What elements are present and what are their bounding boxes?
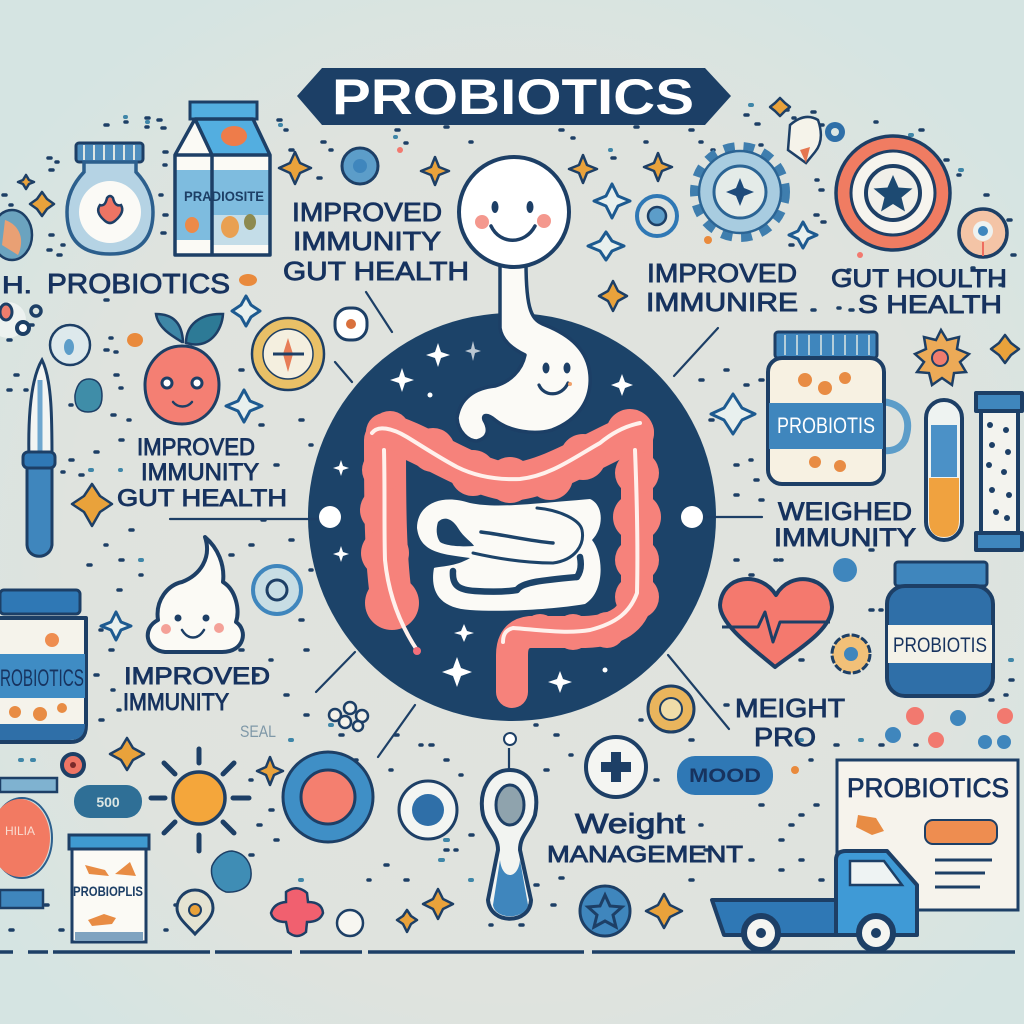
central circle: digestive system — [308, 262, 716, 721]
icon: red button — [283, 752, 373, 842]
icon: yogurt swirl — [148, 537, 243, 652]
icon: probiotic jar right with mug handle — [768, 332, 908, 484]
icon: gold sunburst — [915, 330, 969, 385]
text block: left top — [283, 197, 469, 286]
icon: orange-red dot — [62, 754, 84, 776]
icon: flower donut — [832, 635, 870, 673]
text block: left middle: IMMUNITY — [141, 459, 259, 486]
icon: peach character — [145, 314, 223, 424]
icon: small dial — [177, 890, 213, 934]
text block: left lower: IMPROVED — [124, 663, 270, 690]
badge: 500: 500 — [96, 794, 120, 810]
icon: jar lower left: PROBIOPLIS — [73, 883, 143, 899]
icon: concentric ring left — [253, 566, 301, 614]
ground line — [0, 950, 1015, 954]
icon: probiotics jar left — [0, 590, 86, 742]
text: probiotics left: PROBIOTICS — [47, 268, 230, 299]
text block: right lower: PRO — [754, 722, 816, 752]
text block: left lower: IMMUNITY — [123, 689, 229, 716]
icon: jar top left — [67, 143, 153, 254]
text block: right lower — [735, 693, 845, 752]
icon: jar lower left — [69, 835, 149, 942]
icon: milk carton: PRADIOSITE — [184, 188, 264, 204]
icon: star shield — [836, 136, 950, 250]
text block: far right: S HEALTH — [858, 291, 1002, 319]
icon: sketch badge — [788, 117, 845, 163]
icon: sun — [151, 749, 249, 851]
icon: jar bottom edge: HILIA — [5, 824, 35, 838]
text block: right middle: IMMUNITY — [774, 524, 916, 552]
mood badge — [677, 756, 773, 795]
icon: blue badge — [342, 148, 378, 184]
large intestine — [360, 409, 661, 692]
text block: left middle: GUT HEALTH — [117, 485, 287, 512]
poster: probiotics — [837, 760, 1018, 910]
text block: right lower: MEIGHT — [735, 693, 845, 723]
icon: heart with pulse — [720, 579, 832, 667]
icon: gold ring — [648, 686, 694, 732]
icon: gear — [694, 146, 786, 238]
icon: capsule tube — [926, 400, 962, 540]
icon: blue eye badge — [399, 781, 457, 839]
icon: compass — [252, 318, 324, 390]
icon: swirl at far left — [0, 210, 32, 260]
icon: white pebble — [337, 910, 363, 936]
faint text: seal: SEAL — [240, 722, 276, 741]
icon: plus badge — [586, 737, 646, 797]
icon: round light drop — [50, 325, 90, 365]
icon: probiotics jar lower right: PROBIOTIS — [893, 634, 987, 657]
icon: broken shapes far left — [0, 302, 41, 338]
icon: probiotic jar right with mug handle: PROBIOTIS — [777, 413, 875, 438]
text block: left top: IMMUNITY — [293, 226, 441, 256]
icon: small medal — [959, 209, 1007, 257]
icon: capsule spoon — [482, 733, 536, 919]
icon: blue star badge — [580, 886, 630, 936]
icon: probiotics jar left: ROBIOTICS — [0, 665, 84, 692]
icon: teal blob lower — [212, 851, 251, 892]
text block: far right — [831, 265, 1007, 319]
text block: far right: GUT HOULTH — [831, 265, 1007, 293]
icon: milk carton — [175, 102, 270, 255]
icon: pink cross — [271, 888, 323, 936]
text block: left top: IMPROVED — [292, 197, 442, 227]
icon: teal blob — [75, 379, 102, 412]
badge: 500 — [74, 785, 142, 818]
icon: cluster ring — [329, 702, 368, 731]
mood badge: MOOD — [689, 766, 761, 787]
icon: jar bottom edge — [0, 778, 57, 908]
poster: probiotics: PROBIOTICS — [847, 773, 1009, 803]
icon: probiotics jar lower right — [887, 562, 993, 696]
icon: tube left — [23, 360, 55, 556]
icon: small target — [335, 308, 367, 340]
text block: weight management: MANAGEMENT — [547, 841, 743, 867]
connector dots — [319, 506, 341, 528]
text block: left lower — [123, 663, 270, 716]
text block: right top: IMMUNIRE — [646, 287, 798, 317]
title banner: PROBIOTICS — [332, 69, 694, 125]
text block: right middle: WEIGHED — [778, 498, 912, 526]
icon: pill column — [976, 393, 1022, 550]
icon: blue truck — [712, 851, 917, 950]
text block: weight management: Weight — [575, 808, 685, 839]
text block: right top: IMPROVED — [647, 258, 797, 288]
text block: left top: GUT HEALTH — [283, 256, 469, 286]
text block: left middle — [117, 434, 287, 512]
character: smiling head — [459, 157, 569, 267]
text block: right middle — [774, 498, 916, 552]
text block: left middle: IMPROVED — [137, 434, 255, 461]
navy circle — [308, 313, 716, 721]
connector lines — [170, 292, 762, 757]
stomach — [457, 262, 590, 441]
text block: right top — [646, 258, 798, 317]
sparkles — [333, 341, 633, 693]
text: clipped left label: H. — [2, 272, 32, 299]
text block: weight management — [547, 808, 743, 867]
icon: ring — [637, 196, 677, 236]
small intestine — [417, 499, 601, 611]
